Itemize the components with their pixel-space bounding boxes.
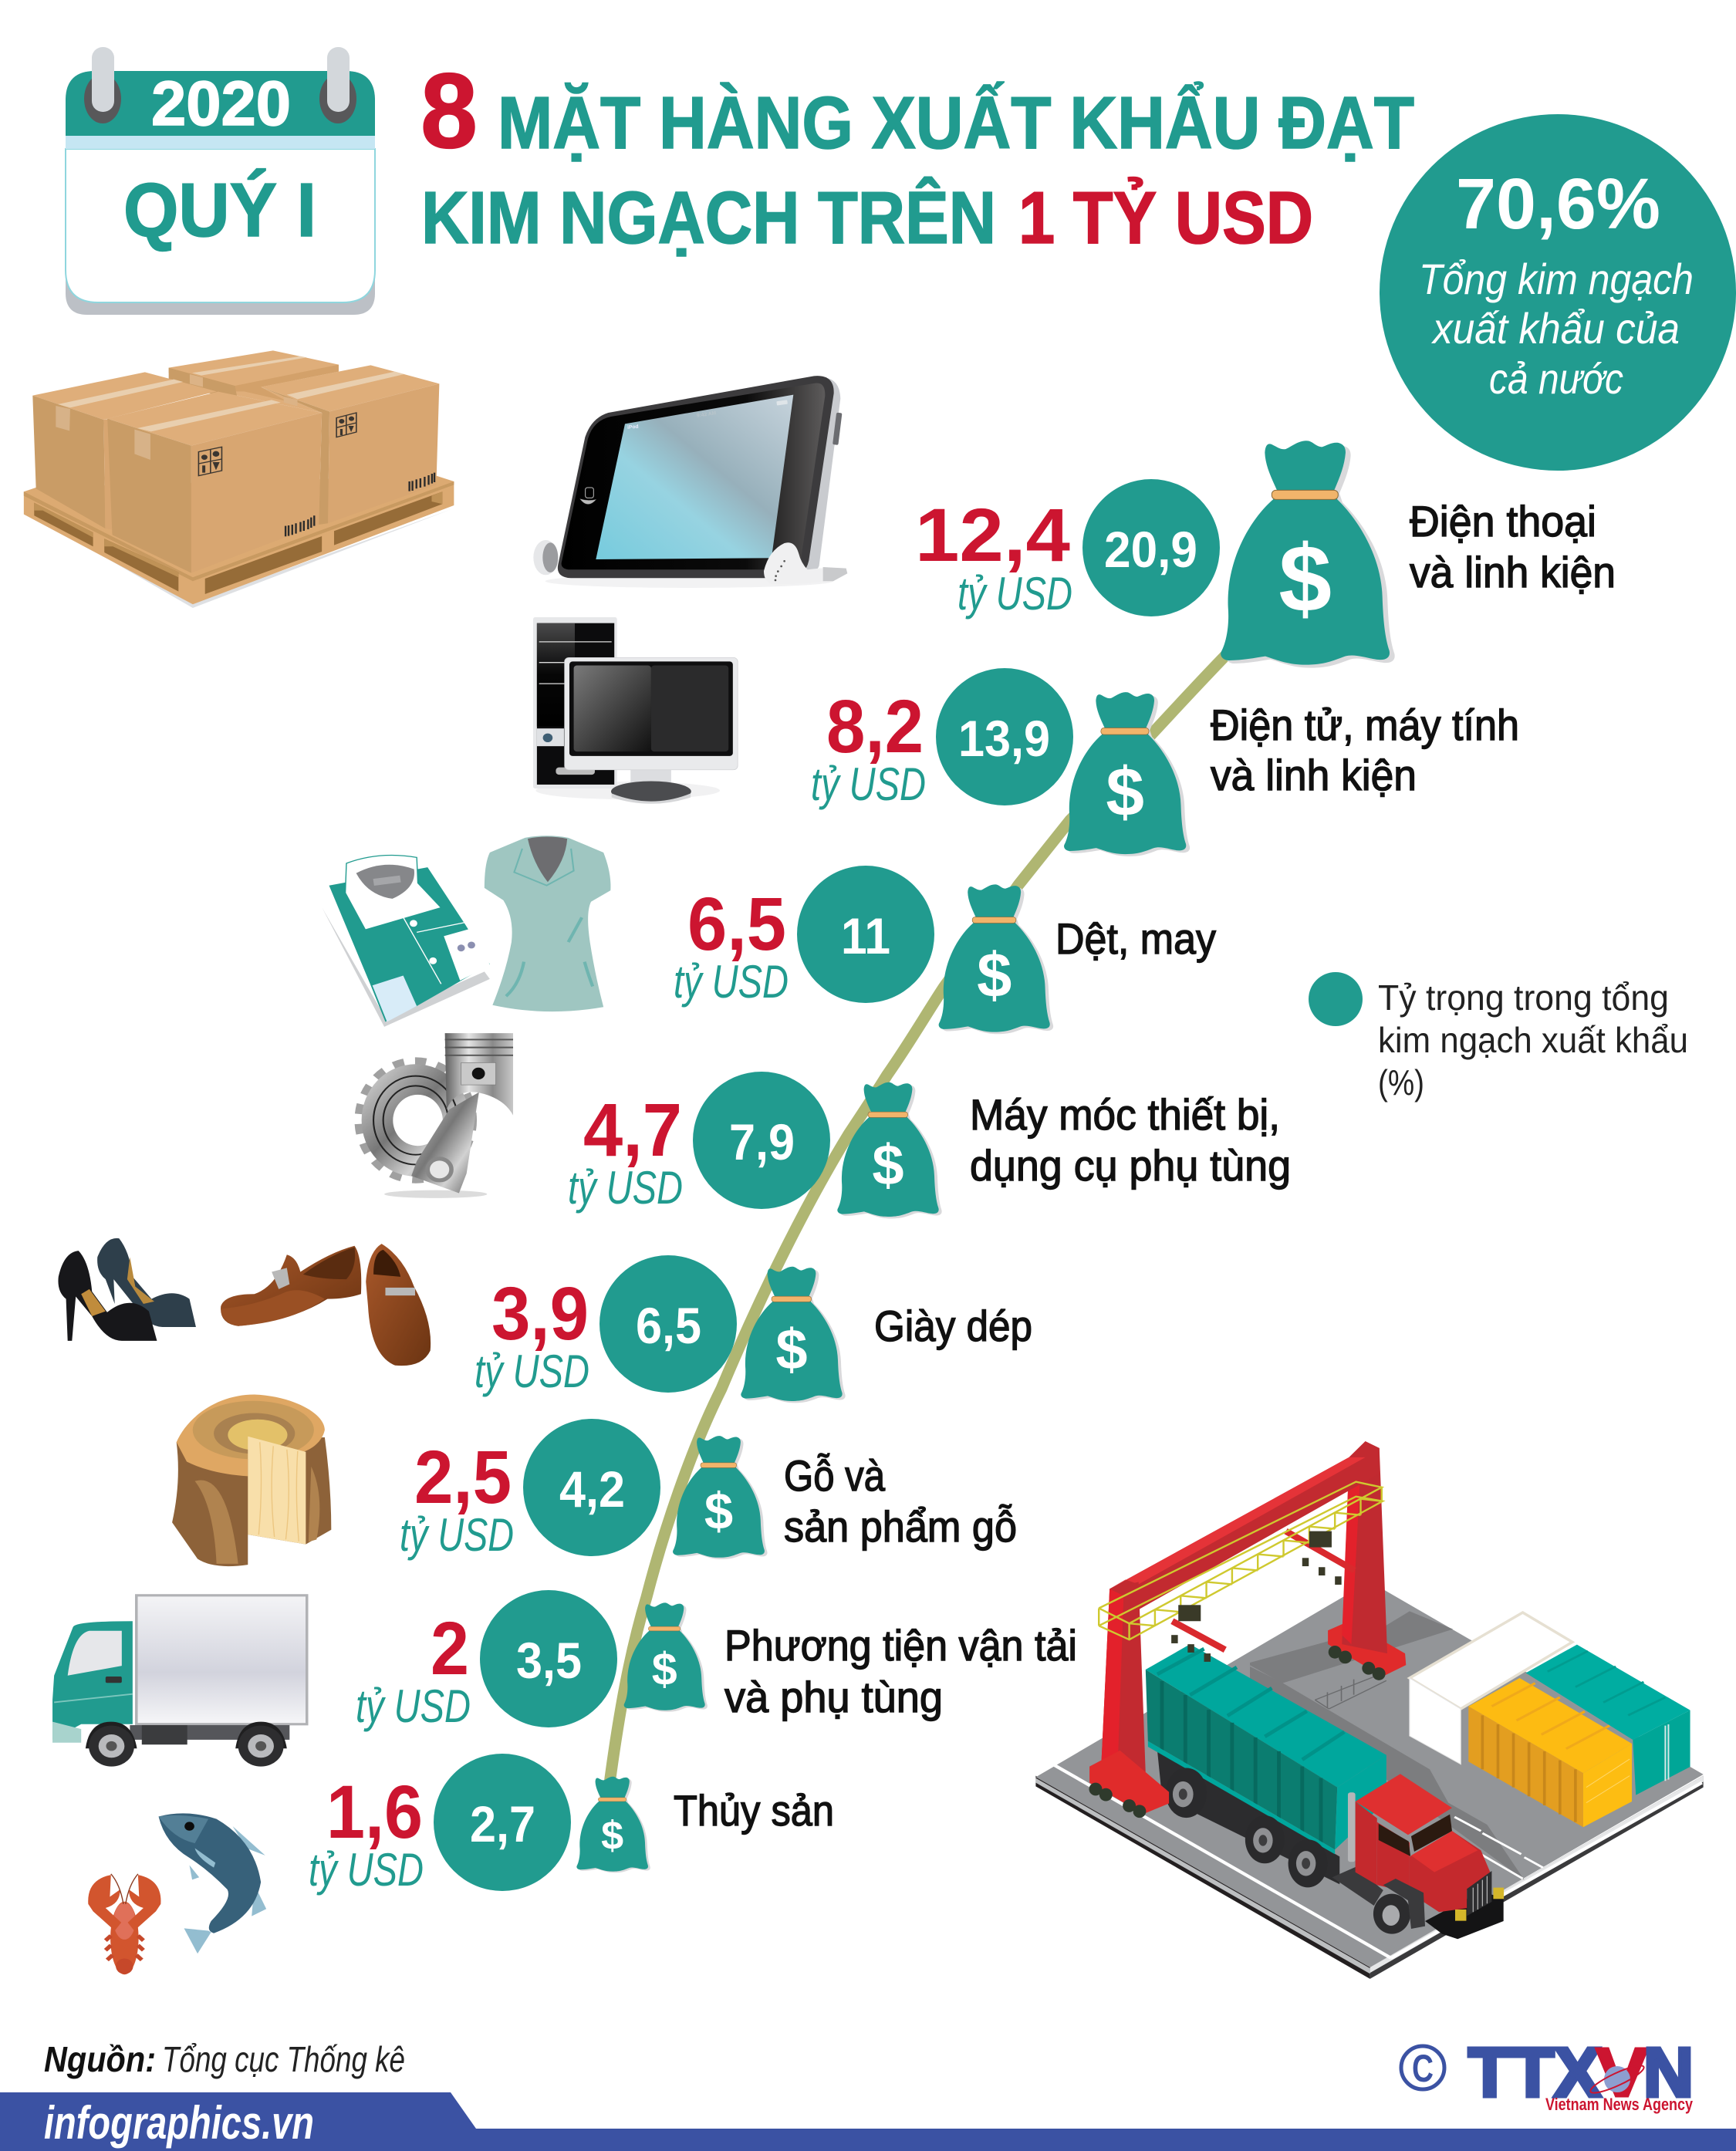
- row 5: footwear: 6,5: [636, 1297, 701, 1354]
- row 4: machinery: [568, 1072, 1291, 1218]
- title: 8: [420, 52, 478, 171]
- port ground: [1035, 1582, 1704, 1979]
- money bag 3: $: [977, 940, 1012, 1011]
- source: [44, 2039, 405, 2079]
- money bag 8: $: [601, 1813, 623, 1858]
- row 3: textiles: 11: [841, 907, 890, 964]
- logo: TTXVN copyright: TTX: [1468, 2035, 1601, 2112]
- money bag 1: $: [1278, 526, 1332, 633]
- row 2: electronics: [811, 668, 1519, 856]
- row 7: vehicles: [356, 1590, 1077, 1732]
- polo shirt: [485, 836, 610, 1011]
- row 7: vehicles: và phụ tùng: [724, 1673, 943, 1721]
- legend: (%): [1378, 1062, 1424, 1103]
- money bag 7: $: [652, 1643, 677, 1695]
- money bag 5: [741, 1267, 846, 1403]
- illustration: gear and piston: [360, 1033, 513, 1198]
- row 3: textiles: 6,5: [687, 882, 786, 966]
- row 6: wood: 4,2: [559, 1460, 625, 1518]
- calendar: Quý I 2020: [66, 47, 375, 315]
- row 7: vehicles: 2: [431, 1606, 469, 1690]
- row 7: vehicles: 3,5: [516, 1632, 582, 1689]
- row 8: seafood: [309, 1754, 834, 1896]
- callout: 70,6%: Tổng kim ngạch: [1419, 255, 1694, 303]
- row 4: machinery: dụng cụ phụ tùng: [970, 1141, 1291, 1190]
- high heels: [58, 1238, 196, 1341]
- row 8: seafood: tỷ USD: [309, 1844, 424, 1896]
- footer band: [0, 2092, 1736, 2151]
- row 8: seafood: Thủy sản: [674, 1786, 834, 1835]
- row 1: phones: 12,4: [915, 493, 1070, 577]
- ground shadows and markings: [1250, 1611, 1543, 1880]
- illustration: smartphone and earphones: iPod: [627, 424, 639, 431]
- calendar quarter: QUÝ I: [123, 167, 316, 252]
- row 3: textiles: [674, 866, 1216, 1034]
- money bag 6: [673, 1436, 768, 1559]
- illustration: truck: [52, 1596, 307, 1767]
- illustration: cardboard boxes on pallet: [24, 350, 454, 608]
- row 6: wood: Gỗ và: [784, 1451, 886, 1500]
- row 8: seafood: 1,6: [326, 1770, 423, 1854]
- stacked containers: [1410, 1612, 1690, 1827]
- legend: kim ngạch xuất khẩu: [1378, 1020, 1688, 1060]
- row 4: machinery: Máy móc thiết bị,: [970, 1090, 1280, 1139]
- row 1: phones: [915, 441, 1616, 668]
- truck cab: [1332, 1774, 1504, 1939]
- calendar year: 2020: [151, 69, 291, 139]
- illustration: fish and lobster: [88, 1813, 266, 1974]
- row 6: wood: 2,5: [414, 1435, 512, 1519]
- money bag 5: $: [775, 1318, 808, 1382]
- money bag 4: [837, 1082, 942, 1218]
- loafers: [221, 1244, 431, 1366]
- row 6: wood: tỷ USD: [400, 1509, 514, 1561]
- logo: TTXVN copyright: V: [1596, 2035, 1648, 2112]
- row 7: vehicles: tỷ USD: [356, 1680, 471, 1732]
- row 5: footwear: 3,9: [491, 1271, 589, 1356]
- row 7: vehicles: Phương tiện vận tải: [724, 1621, 1077, 1670]
- money bag 2: $: [1106, 753, 1144, 830]
- source: Nguồn:: [44, 2039, 156, 2079]
- callout: 70,6%: [1380, 114, 1736, 471]
- illustration: wood stump: [172, 1395, 331, 1566]
- money bag 2: [1064, 692, 1190, 856]
- money bag 4: $: [872, 1133, 904, 1197]
- logo: TTXVN copyright: C: [1412, 2047, 1434, 2090]
- title: [420, 52, 1414, 259]
- illustration: desktop computer: [533, 617, 738, 804]
- folded shirt: [322, 856, 490, 1027]
- row 4: machinery: 4,7: [583, 1088, 682, 1172]
- row 4: machinery: tỷ USD: [568, 1162, 683, 1214]
- lobster: [88, 1874, 160, 1974]
- legend: Tỷ trọng trong tổng: [1378, 978, 1669, 1018]
- row 2: electronics: Điện tử, máy tính: [1211, 701, 1519, 749]
- callout: 70,6%: cả nước: [1489, 354, 1623, 403]
- row 1: phones: và linh kiện: [1410, 548, 1616, 596]
- illustration: port with gantry crane, truck and containers: [1035, 1441, 1704, 1979]
- row 3: textiles: Dệt, may: [1055, 914, 1216, 963]
- money bag 8: [576, 1777, 650, 1872]
- money bag 3: [939, 884, 1053, 1034]
- title: KIM NGẠCH TRÊN: [421, 176, 996, 259]
- logo: TTXVN copyright: [1401, 2035, 1694, 2114]
- illustration: clothing: [322, 836, 610, 1027]
- legend: [1309, 972, 1688, 1103]
- logo: TTXVN copyright: N: [1643, 2035, 1694, 2112]
- source: Tổng cục Thống kê: [162, 2039, 405, 2079]
- row 6: wood: [400, 1419, 1017, 1561]
- row 8: seafood: 2,7: [470, 1795, 535, 1852]
- money bag 7: [624, 1602, 708, 1712]
- row 2: electronics: 8,2: [826, 684, 924, 768]
- money bag 1: [1221, 441, 1395, 668]
- row 1: phones: tỷ USD: [958, 568, 1072, 620]
- money bag 6: $: [704, 1482, 733, 1540]
- container on truck and red truck rear: [1146, 1644, 1386, 1887]
- row 4: machinery: 7,9: [729, 1113, 795, 1170]
- row 5: footwear: [475, 1255, 1032, 1403]
- row 2: electronics: và linh kiện: [1211, 751, 1417, 799]
- growth curve: [610, 654, 1227, 1784]
- gantry crane: [1089, 1441, 1406, 1818]
- callout: 70,6%: xuất khẩu của: [1430, 304, 1680, 353]
- fish: [159, 1813, 266, 1953]
- title: MẶT HÀNG XUẤT KHẨU ĐẠT: [498, 81, 1414, 164]
- logo: TTXVN copyright: Vietnam News Agency: [1545, 2095, 1694, 2114]
- row 3: textiles: tỷ USD: [674, 956, 789, 1008]
- illustration: smartphone and earphones: 9:42 AM: [697, 410, 717, 419]
- row 5: footwear: tỷ USD: [475, 1346, 589, 1397]
- row 1: phones: 20,9: [1104, 521, 1197, 578]
- footer band: infographics.vn: [44, 2097, 314, 2149]
- row 6: wood: sản phẩm gỗ: [784, 1502, 1017, 1551]
- callout: 70,6%: 70,6%: [1456, 164, 1660, 244]
- row 5: footwear: Giày dép: [874, 1302, 1032, 1350]
- row 2: electronics: tỷ USD: [811, 758, 926, 810]
- illustration: smartphone and earphones: [533, 376, 847, 588]
- row 1: phones: Điện thoại: [1410, 497, 1596, 545]
- row 2: electronics: 13,9: [958, 710, 1050, 767]
- illustration: shoes: [58, 1238, 431, 1366]
- title: 1 TỶ USD: [1018, 177, 1313, 259]
